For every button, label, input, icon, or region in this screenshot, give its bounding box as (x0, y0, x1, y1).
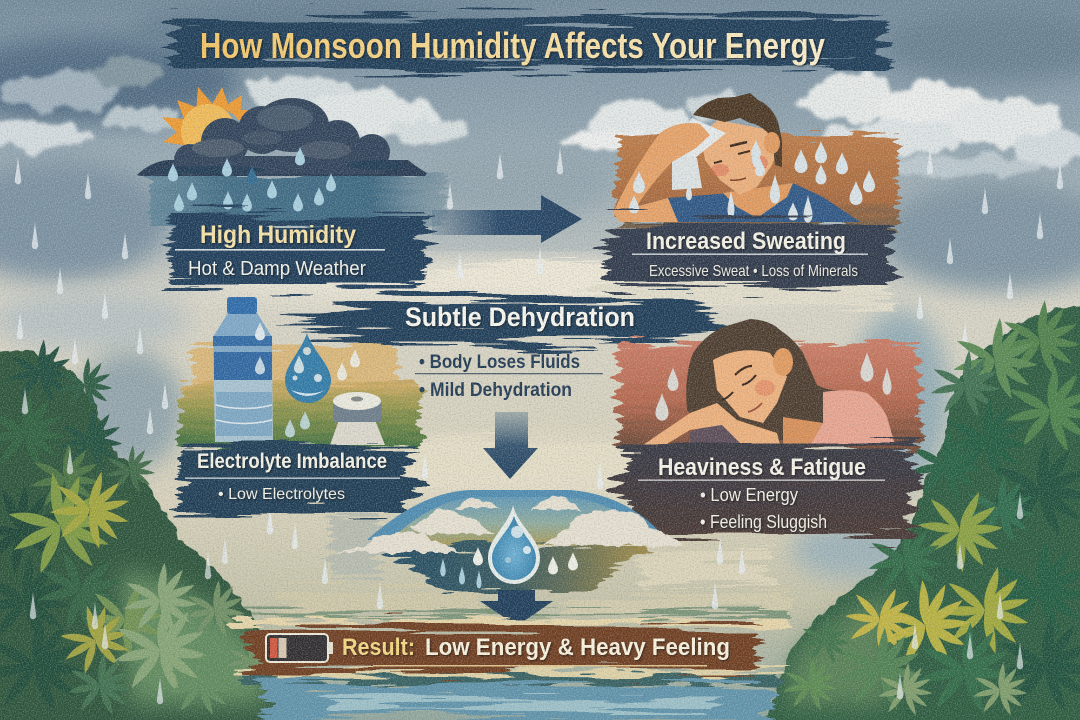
blue wash under the cloud (150, 174, 445, 226)
clouds: top right (565, 74, 1080, 176)
rain drops in the background (15, 147, 1063, 609)
icon: side drops (440, 547, 578, 588)
banner: electrolyte imbalance (180, 445, 415, 513)
illustration: tired woman (643, 319, 895, 445)
icon: large water drop (285, 333, 331, 403)
text: excessive sweat: Excessive Sweat • Loss of Minerals (649, 263, 858, 280)
illustration: sweating man (613, 93, 860, 222)
panel: electrolyte imbalance (180, 297, 420, 513)
banner: subtle dehydration (275, 298, 722, 345)
icon: rain drops (168, 147, 336, 212)
horizontal painted streaks (440, 262, 610, 288)
heading: Subtle Dehydration (405, 302, 635, 332)
icon: storm cloud (137, 98, 427, 176)
rain over the leaves (22, 387, 1023, 704)
scene: dome with clouds and drop (335, 490, 685, 591)
result text: Result: (342, 634, 415, 661)
orange wash (618, 136, 898, 228)
water at the bottom (240, 674, 780, 719)
title banner (172, 18, 882, 68)
clouds: top left (0, 56, 463, 149)
panel: heaviness and fatigue (618, 319, 920, 536)
icon: low battery (266, 634, 333, 662)
foliage: left jungle leaves (0, 339, 305, 720)
result banner (232, 619, 788, 676)
icon: water bottle (213, 297, 273, 442)
icon: salt shaker (330, 392, 385, 445)
heading: Heaviness & Fatigue (658, 454, 866, 481)
red wash (618, 344, 920, 448)
result text: Low Energy & Heavy Feeling (425, 634, 730, 661)
text: low electrolytes: • Low Electrolytes (218, 486, 345, 503)
icon: center drop (488, 505, 540, 584)
icon: drops (656, 352, 892, 421)
heading: Electrolyte Imbalance (197, 450, 387, 473)
panel: subtle dehydration (275, 298, 722, 401)
list: dehydration points: • Body Loses Fluids (419, 352, 580, 373)
icon: small drops (285, 349, 360, 438)
banner: heaviness and fatigue (622, 446, 914, 536)
list: dehydration points: • Mild Dehydration (419, 380, 572, 401)
text: low energy: • Low Energy (700, 485, 798, 505)
arrow: down to result (480, 590, 553, 626)
icon: clouds (335, 496, 685, 553)
foliage: right jungle leaves (765, 300, 1080, 720)
arrow: down (483, 412, 538, 479)
heading: Increased Sweating (646, 228, 846, 255)
panel: high humidity (137, 87, 445, 286)
icon: sun (162, 87, 250, 158)
banner: high humidity (170, 216, 425, 286)
yellow and green wash (192, 344, 397, 388)
title: How Monsoon Humidity Affects Your Energy (200, 25, 825, 66)
list: dehydration points (415, 352, 603, 401)
arrow: right (432, 195, 582, 243)
banner: increased sweating (607, 223, 892, 285)
panel: increased sweating (607, 93, 898, 285)
icon: sweat drops (629, 140, 875, 223)
text: feeling sluggish: • Feeling Sluggish (700, 512, 827, 532)
heading: High Humidity (200, 221, 356, 249)
text: hot and damp: Hot & Damp Weather (188, 258, 366, 280)
